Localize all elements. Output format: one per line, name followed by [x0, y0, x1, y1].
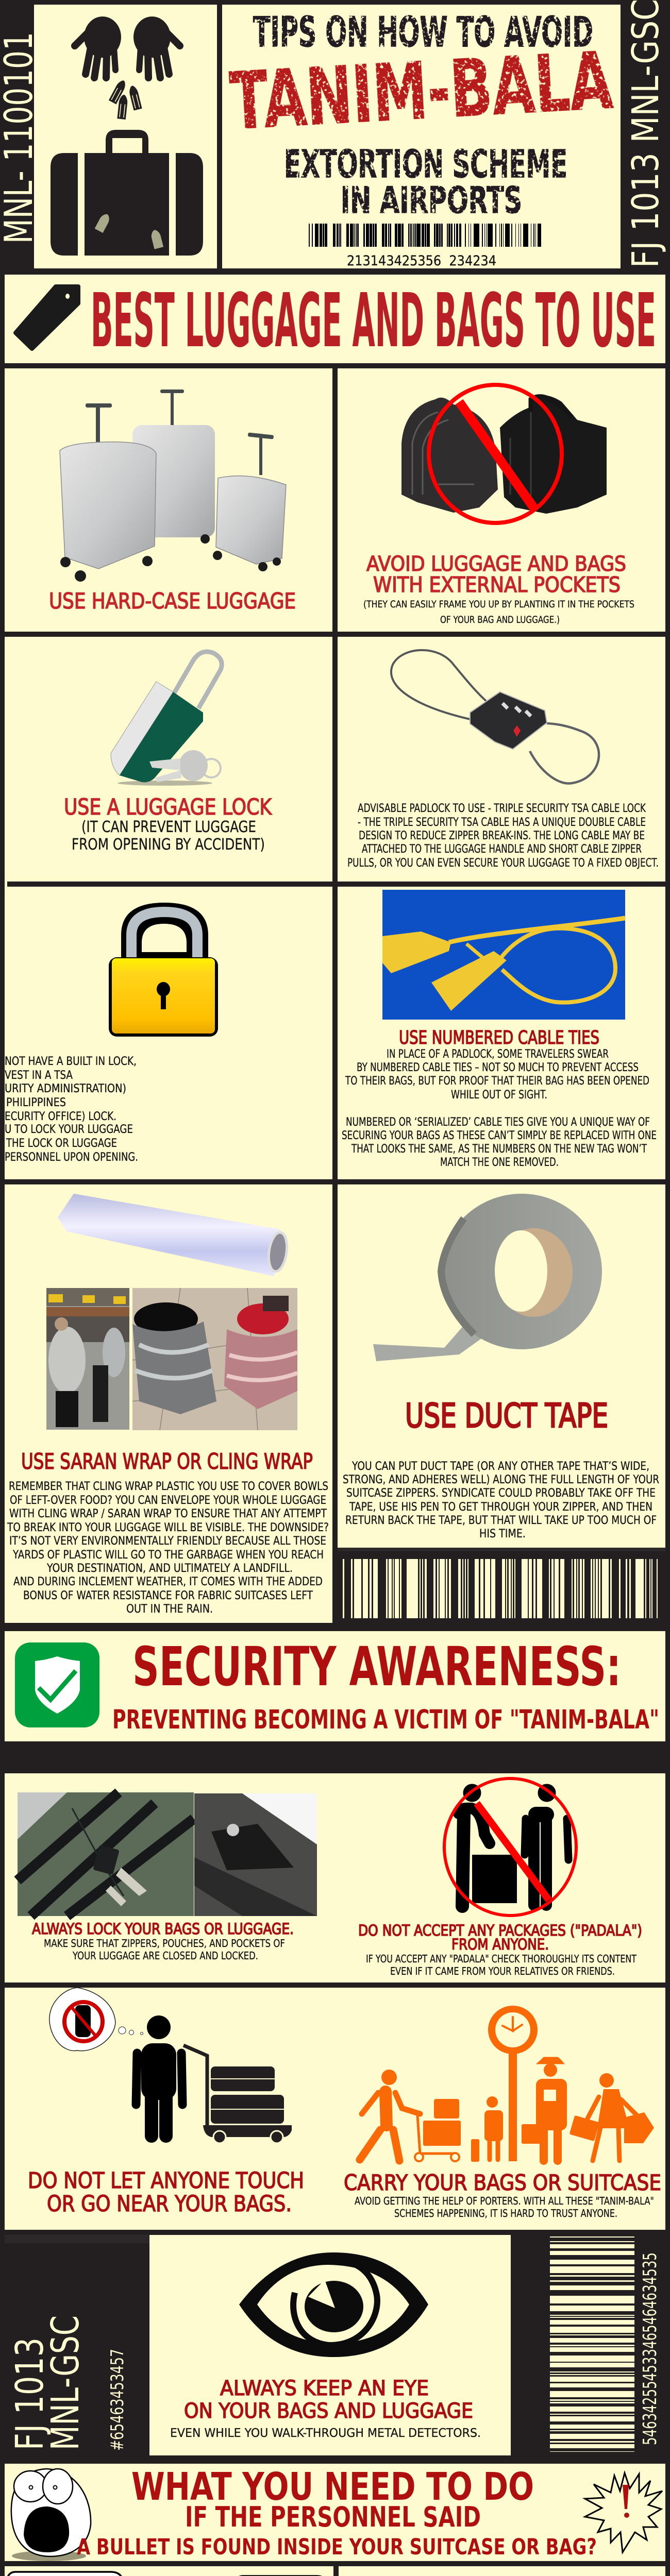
barcode number: 213143425356 234234 [347, 253, 496, 269]
image: cling wrap roll [58, 1194, 289, 1276]
description: HIS TIME. [479, 1528, 526, 1540]
description, clipped at the panel edge: PHILIPPINES [6, 1096, 66, 1109]
image: duct tape roll [373, 1194, 602, 1361]
description: IT’S NOT VERY ENVIRONMENTALLY FRIENDLY BECAUSE ALL THOSE [9, 1535, 326, 1548]
image: green padlock and key [111, 652, 222, 786]
heading line 2: OR GO NEAR YOUR BAGS. [47, 2191, 292, 2217]
subtext line 2: EVEN IF IT CAME FROM YOUR RELATIVES OR FRIENDS. [390, 1965, 615, 1977]
description, clipped at the panel edge: NOT HAVE A BUILT IN LOCK, [5, 1055, 137, 1068]
icon: eye [239, 2252, 428, 2357]
section heading: WHAT YOU NEED TO DO [131, 2465, 534, 2509]
photo: suitcase lock [194, 1793, 317, 1916]
description, clipped at the panel edge: URITY ADMINISTRATION) [5, 1082, 126, 1095]
section banner: what you need to do [5, 2464, 665, 2561]
title line: in airports: IN AIRPORTS [341, 179, 522, 222]
barcode digits: 546342554533465464634535 [640, 2252, 661, 2445]
panel: lock bags and packages [5, 1773, 665, 1982]
description, clipped at the panel edge: ECURITY OFFICE) LOCK. [5, 1110, 116, 1123]
icon: open hands [75, 16, 180, 78]
heading: ALWAYS KEEP AN EYE [220, 2377, 429, 2400]
description: MATCH THE ONE REMOVED. [440, 1156, 559, 1169]
icon: thought bubble [49, 1988, 143, 2051]
panel: hard-case luggage [5, 368, 332, 632]
icon: person with cart [136, 2015, 292, 2143]
description: AND DURING INCLEMENT WEATHER, IT COMES WITH THE ADDED [13, 1575, 323, 1588]
icon: falling bullets [108, 78, 143, 120]
panel: bullet accusation [5, 2566, 333, 2576]
heading: USE DUCT TAPE [405, 1397, 608, 1435]
barcode: cream stripes [343, 1559, 658, 1618]
speech bubble: officer [6, 2572, 124, 2576]
icon: suitcase [51, 130, 203, 256]
description: TO BREAK INTO YOUR LUGGAGE WILL BE VISIBLE. THE DOWNSIDE? [7, 1521, 329, 1534]
icon: green shield [15, 1642, 99, 1727]
heading: AVOID LUGGAGE AND BAGS [366, 552, 626, 576]
subtext line 2: FROM OPENING BY ACCIDENT) [72, 836, 265, 854]
icon: shocked face [11, 2469, 91, 2561]
subtext line 2: SCHEMES HAPPENING, IT IS HARD TO TRUST ANYONE. [394, 2207, 617, 2219]
icon: orange travellers [360, 2006, 654, 2162]
panel: TSA padlock [5, 887, 332, 1179]
description: IN PLACE OF A PADLOCK, SOME TRAVELERS SWEAR [387, 1048, 609, 1061]
heading: USE HARD-CASE LUGGAGE [49, 588, 296, 614]
subtext: (IT CAN PREVENT LUGGAGE [81, 818, 256, 836]
description [7, 1480, 329, 1616]
panel: header icons [34, 5, 217, 268]
description [343, 1460, 659, 1540]
boarding pass strip: MNL-GSC: MNL-GSC [43, 2315, 88, 2450]
boarding pass strip: number: #65463453457 [107, 2349, 128, 2451]
panel: saran wrap [5, 1184, 332, 1623]
panel: TSA cable lock [338, 637, 665, 882]
description: OUT IN THE RAIN. [126, 1603, 213, 1616]
description, clipped at the panel edge: U TO LOCK YOUR LUGGAGE [5, 1123, 133, 1136]
heading: ALWAYS LOCK YOUR BAGS OR LUGGAGE. [32, 1920, 294, 1938]
description: YARDS OF PLASTIC WILL GO TO THE GARBAGE WHEN YOU REACH [12, 1549, 324, 1562]
icon: no packages [444, 1778, 576, 1916]
panel: screen shot image [339, 2566, 665, 2576]
barcode: right strip [550, 2236, 634, 2452]
panel: numbered cable ties [338, 887, 665, 1179]
heading: DO NOT LET ANYONE TOUCH [28, 2168, 304, 2194]
subtext line 2: YOUR LUGGAGE ARE CLOSED AND LOCKED. [72, 1950, 258, 1962]
photo: wrapped suitcases [132, 1288, 297, 1430]
heading: USE SARAN WRAP OR CLING WRAP [21, 1449, 313, 1474]
panel: keep an eye [149, 2235, 511, 2455]
panel: luggage lock [5, 637, 332, 882]
description, clipped at the panel edge: PERSONNEL UPON OPENING. [5, 1151, 138, 1164]
image: silver suitcases [60, 389, 286, 582]
description: REMEMBER THAT CLING WRAP PLASTIC YOU USE TO COVER BOWLS [9, 1480, 328, 1493]
panel: title [222, 5, 621, 269]
description, clipped at the panel edge: VEST IN A TSA [5, 1069, 73, 1082]
subtext: MAKE SURE THAT ZIPPERS, POUCHES, AND POCKETS OF [44, 1937, 285, 1950]
description, clipped at the panel edge: THE LOCK OR LUGGAGE [6, 1137, 117, 1150]
description: YOUR DESTINATION, AND ULTIMATELY A LANDFILL. [46, 1562, 293, 1575]
description [347, 802, 659, 870]
heading line 2: FROM ANYONE. [451, 1936, 549, 1953]
note line 2: OF YOUR BAG AND LUGGAGE.) [440, 614, 560, 625]
section banner: best luggage and bags to use [5, 275, 665, 364]
section banner: security awareness [5, 1631, 665, 1741]
description: WITH CLING WRAP / SARAN WRAP TO ENSURE THAT ANY ATTEMPT [9, 1507, 327, 1520]
image: cable lock [391, 650, 599, 784]
photo: locked zipper [18, 1792, 194, 1916]
photo: wrapped backpacks [46, 1288, 129, 1430]
heading line 2: WITH EXTERNAL POCKETS [373, 572, 621, 597]
section subheading: IF THE PERSONNEL SAID [185, 2501, 481, 2533]
boarding pass strip: FJ 1013: FJ 1013 [8, 2337, 52, 2450]
icon: starburst exclamation [585, 2473, 662, 2552]
panel: duct tape [338, 1184, 665, 1548]
image: crossed-out bags [401, 385, 607, 523]
panel: do not let anyone touch / carry your bags [5, 1988, 665, 2230]
description: WHILE OUT OF SIGHT. [451, 1089, 547, 1101]
description, clipped at the panel edge [5, 1055, 138, 1164]
icon: yellow padlock [109, 903, 218, 1037]
barcode [309, 224, 543, 247]
description: BONUS OF WATER RESISTANCE FOR FABRIC SUITCASES LEFT [23, 1589, 313, 1602]
panel: avoid external pockets [338, 368, 665, 632]
description: OF LEFT-OVER FOOD? YOU CAN ENVELOPE YOUR WHOLE LUGGAGE [10, 1494, 326, 1507]
icon: luggage tag [15, 286, 78, 349]
image: yellow cable ties on blue [382, 890, 625, 1020]
heading: USE NUMBERED CABLE TIES [399, 1027, 599, 1048]
heading: USE A LUGGAGE LOCK [64, 794, 273, 820]
subtext: EVEN WHILE YOU WALK-THROUGH METAL DETECTORS. [170, 2427, 481, 2440]
heading line 2: ON YOUR BAGS AND LUGGAGE [184, 2399, 473, 2423]
description [342, 1048, 657, 1169]
